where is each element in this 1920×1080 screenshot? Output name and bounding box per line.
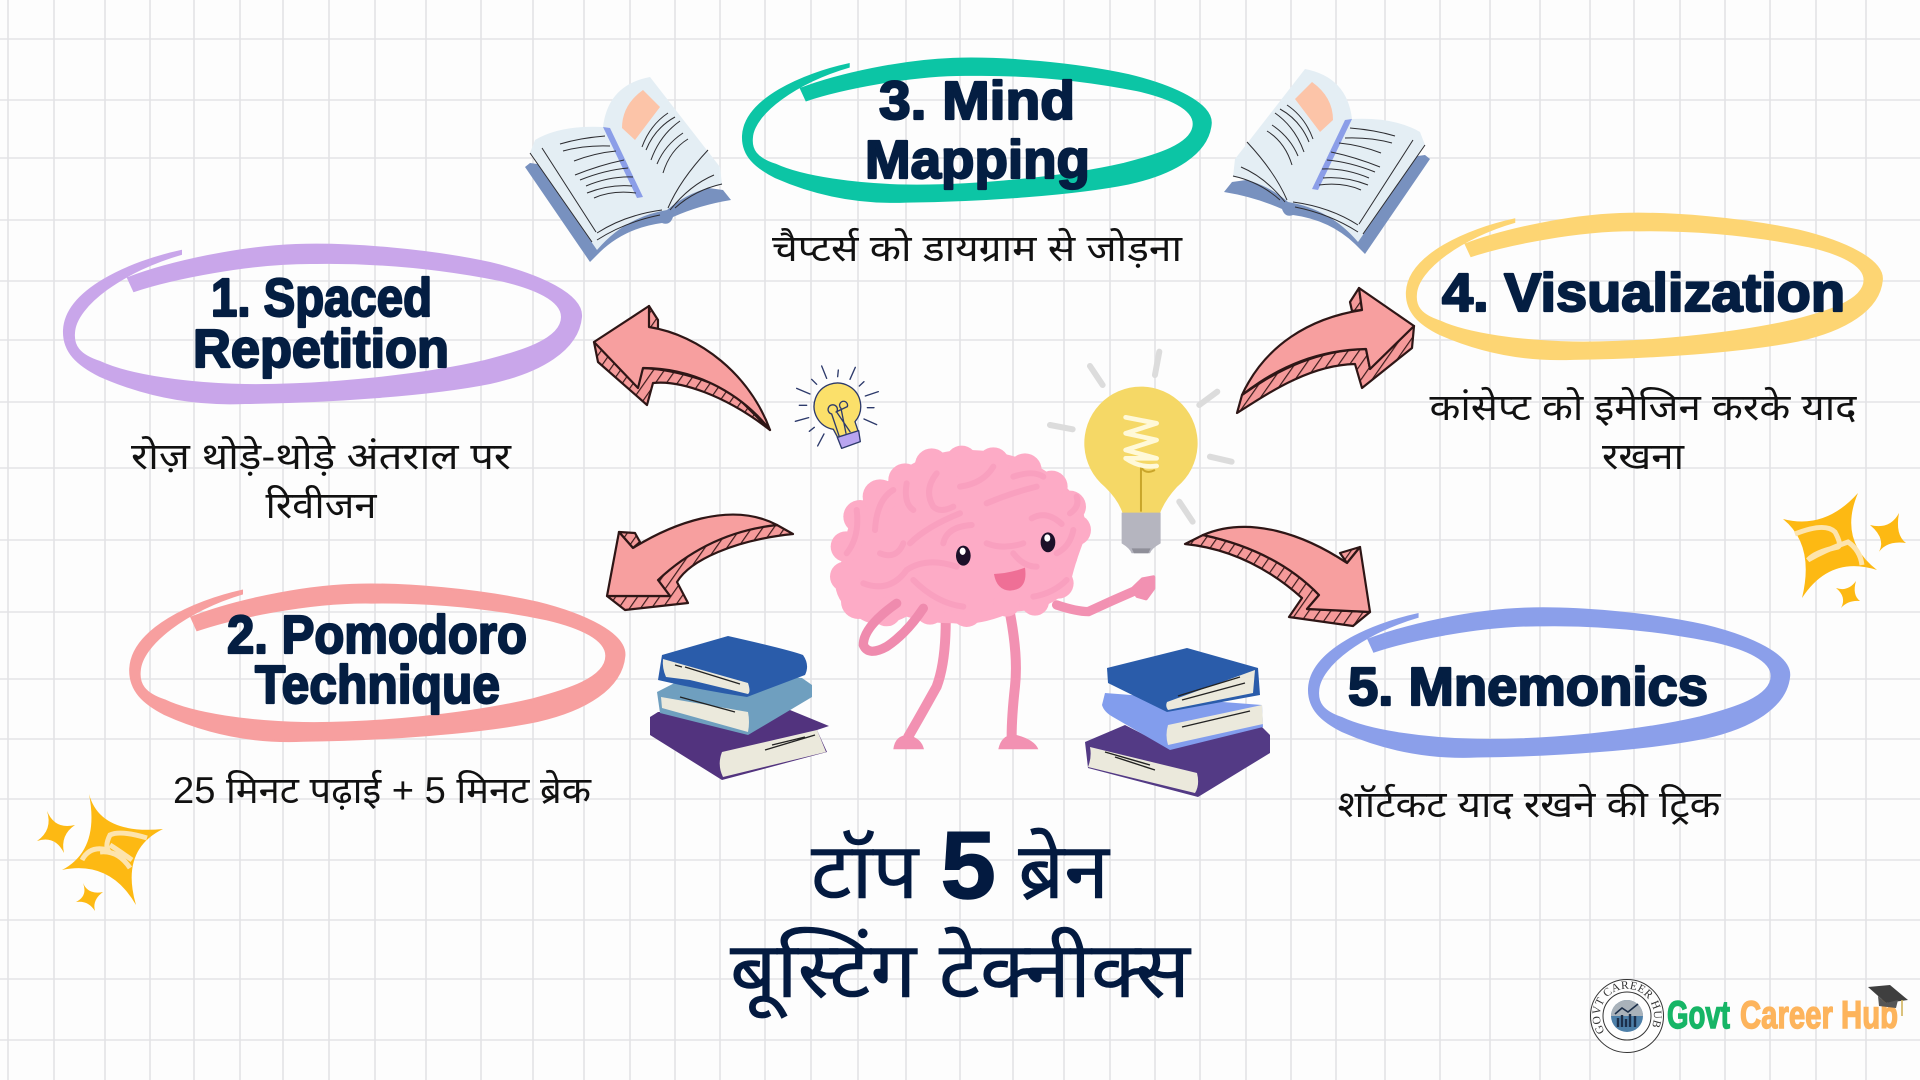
brush oval: coral: [130, 584, 625, 741]
title: [730, 812, 1191, 1019]
text: mnemonics description: शॉर्टकट याद रखने की ट्रिक: [1338, 783, 1721, 825]
icon: graduation cap: [1868, 985, 1908, 1016]
heading: 1. Spaced Repetition: 1. Spaced: [211, 268, 432, 328]
text: mind mapping description: चैप्टर्स को डायग्राम से जोड़ना: [772, 227, 1184, 269]
brush oval: blue: [1309, 608, 1789, 757]
logo: Govt Career Hub: [1590, 979, 1908, 1053]
heading: 2. Pomodoro Technique: 2. Pomodoro: [227, 605, 527, 665]
panel: 1. Spaced Repetition: [64, 245, 581, 403]
icon: sparkle stars left: [37, 794, 163, 911]
text: visualization description: कांसेप्ट को इमेजिन करके याद: [1430, 387, 1858, 428]
text: spaced repetition description: [131, 436, 512, 526]
logo wordmark: [1667, 994, 1898, 1037]
panel: 3. Mind Mapping: [743, 58, 1211, 202]
logo wordmark: Govt: [1667, 994, 1730, 1037]
title: बूस्टिंग टेक्नीक्स: [730, 926, 1191, 1019]
panel: 4. Visualization: [1407, 214, 1882, 359]
arrow: to visualization: [1237, 288, 1414, 413]
arrow: to mnemonics: [1185, 527, 1370, 626]
heading: 3. Mind Mapping: Mapping: [865, 130, 1090, 190]
panel: 2. Pomodoro Technique: [130, 584, 625, 741]
heading: 4. Visualization: 4. Visualization: [1442, 263, 1845, 323]
illustration: brain character: [830, 446, 1153, 749]
heading: 2. Pomodoro Technique: [227, 605, 527, 715]
brain body: [830, 446, 1091, 627]
icon: open book left: [525, 77, 731, 262]
arrow: to spaced repetition: [594, 306, 770, 430]
left arm: [863, 603, 923, 651]
brush oval: purple: [64, 245, 581, 403]
heading: 3. Mind Mapping: 3. Mind: [879, 71, 1075, 131]
icon: sparkle stars right: [1783, 493, 1906, 608]
icon: open book right: [1224, 69, 1430, 254]
feet: [893, 735, 1038, 749]
eyes: [956, 532, 1055, 566]
logo emblem: GOVT CAREER HUB: [1592, 981, 1662, 1034]
heading: 5. Mnemonics: 5. Mnemonics: [1348, 657, 1708, 717]
heading: 1. Spaced Repetition: Repetition: [193, 319, 449, 379]
text: spaced repetition description: रिवीजन: [266, 485, 378, 526]
brain wrinkles: [847, 467, 1077, 607]
panel: 5. Mnemonics: [1309, 608, 1789, 757]
text: pomodoro description: 25 मिनट पढ़ाई + 5 मिनट ब्रेक: [173, 769, 592, 811]
brush oval: yellow: [1407, 214, 1882, 359]
icon: big light bulb: [1050, 352, 1232, 553]
right arm pointing at bulb: [1057, 577, 1153, 612]
mouth: [994, 568, 1025, 591]
brush oval: teal: [743, 58, 1211, 202]
heading: 1. Spaced Repetition: [193, 268, 449, 379]
legs: [908, 612, 1016, 737]
icon: book stack right: [1085, 648, 1270, 797]
text: visualization description: [1430, 387, 1858, 477]
text: visualization description: रखना: [1602, 436, 1686, 477]
icon: book stack left: [650, 636, 829, 780]
icon: small light bulb: [795, 366, 878, 448]
heading: 3. Mind Mapping: [865, 71, 1090, 190]
arrow: to pomodoro: [607, 515, 793, 610]
title: टॉप 5 ब्रेन: [811, 812, 1111, 919]
heading: 2. Pomodoro Technique: Technique: [255, 655, 500, 715]
text: spaced repetition description: रोज़ थोड़े-थोड़े अंतराल पर: [131, 436, 512, 477]
